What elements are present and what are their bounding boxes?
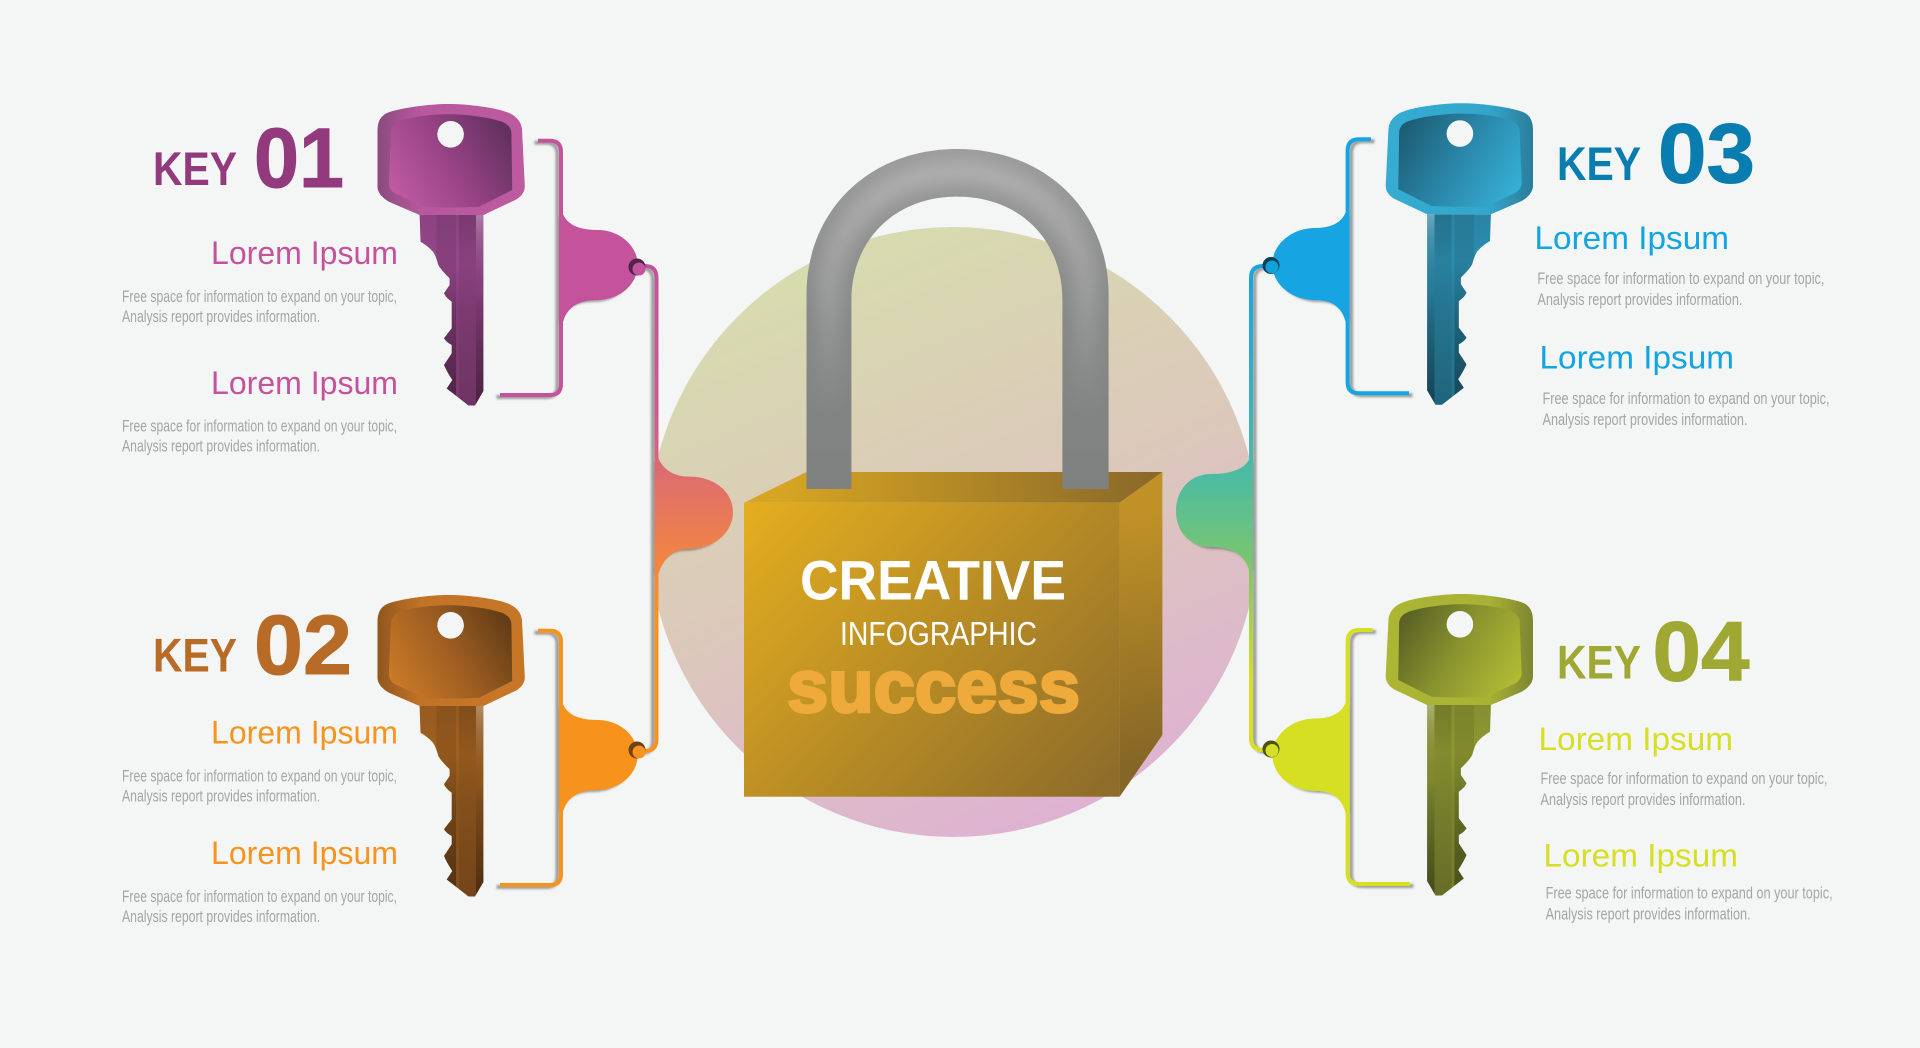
text block 01a: Analysis report provides information. [122,307,320,326]
text block 03b [1540,339,1830,429]
text block 02a: Analysis report provides information. [122,787,320,806]
gradient circle behind lock [648,227,1258,837]
text block 01b [122,365,398,456]
lock title text: CREATIVE [800,549,1066,612]
icon: purple key [378,104,525,410]
node dot 03 [1262,257,1280,274]
text block 02b: Free space for information to expand on your topic, [122,887,397,906]
bracket connector 03 [1272,139,1409,393]
icon: blue key [1386,103,1533,409]
bracket connector 01 [500,141,638,395]
text block 04a [1538,721,1828,809]
heading: KEY 04: 04 [1652,605,1750,699]
node dot 04 [1262,740,1280,758]
connector: left central line and blob [640,266,733,751]
text block 03b: Analysis report provides information. [1542,410,1748,429]
lock title text [787,549,1080,728]
lock title text: success [787,645,1080,728]
text block 03a [1534,220,1824,309]
heading: KEY 01: KEY [153,142,237,195]
text block 03b: Lorem Ipsum [1540,339,1734,375]
heading: KEY 02: 02 [254,598,352,692]
text block 01b: Free space for information to expand on your topic, [122,416,397,436]
text block 01a [122,235,398,326]
text block 04b: Analysis report provides information. [1546,904,1751,923]
text block 01a: Free space for information to expand on your topic, [122,287,397,306]
heading: KEY 04 [1557,605,1750,699]
text block 01b: Lorem Ipsum [211,365,398,401]
lock front face [744,503,1120,797]
panel: key 02 [122,595,646,926]
heading: KEY 04: KEY [1557,635,1641,688]
text block 03a: Free space for information to expand on your topic, [1537,269,1824,288]
text block 02a: Lorem Ipsum [211,714,398,750]
text block 03b: Free space for information to expand on your topic, [1542,389,1830,408]
heading: KEY 02 [153,598,352,692]
text block 02a [122,714,398,806]
infographic canvas [122,103,1832,926]
node dot 02 [628,742,646,758]
text block 02a: Free space for information to expand on your topic, [122,767,397,786]
text block 02b: Lorem Ipsum [211,835,398,871]
heading: KEY 01 [153,111,344,205]
heading: KEY 03: 03 [1658,106,1755,200]
panel: key 04 [1262,594,1833,923]
padlock [744,140,1162,797]
text block 02b [122,835,398,926]
text block 04b: Lorem Ipsum [1544,838,1738,874]
icon: orange key [378,595,525,901]
text block 01a: Lorem Ipsum [211,235,398,271]
text block 03a: Analysis report provides information. [1537,290,1742,309]
icon: olive key [1386,594,1533,900]
text block 01b: Analysis report provides information. [122,436,320,456]
bracket connector 02 [500,631,638,885]
panel: key 03 [1262,103,1830,429]
text block 04b [1544,838,1833,923]
lock shackle [800,140,1115,490]
text block 04a: Analysis report provides information. [1540,790,1746,809]
heading: KEY 03: KEY [1557,137,1641,190]
bracket connector 04 [1272,630,1410,884]
text block 04b: Free space for information to expand on your topic, [1546,883,1833,902]
text block 04a: Free space for information to expand on your topic, [1540,769,1828,788]
connector: right central line and blob [1176,266,1270,750]
lock right face [1120,472,1162,797]
lock title text: INFOGRAPHIC [840,615,1037,652]
panel: key 01 [122,104,646,456]
node dot 01 [628,258,646,276]
text block 02b: Analysis report provides information. [122,907,320,926]
heading: KEY 02: KEY [153,629,237,682]
heading: KEY 03 [1557,106,1755,200]
lock top face [744,472,1162,503]
text block 04a: Lorem Ipsum [1538,721,1733,757]
text block 03a: Lorem Ipsum [1534,220,1729,256]
heading: KEY 01: 01 [254,111,344,205]
